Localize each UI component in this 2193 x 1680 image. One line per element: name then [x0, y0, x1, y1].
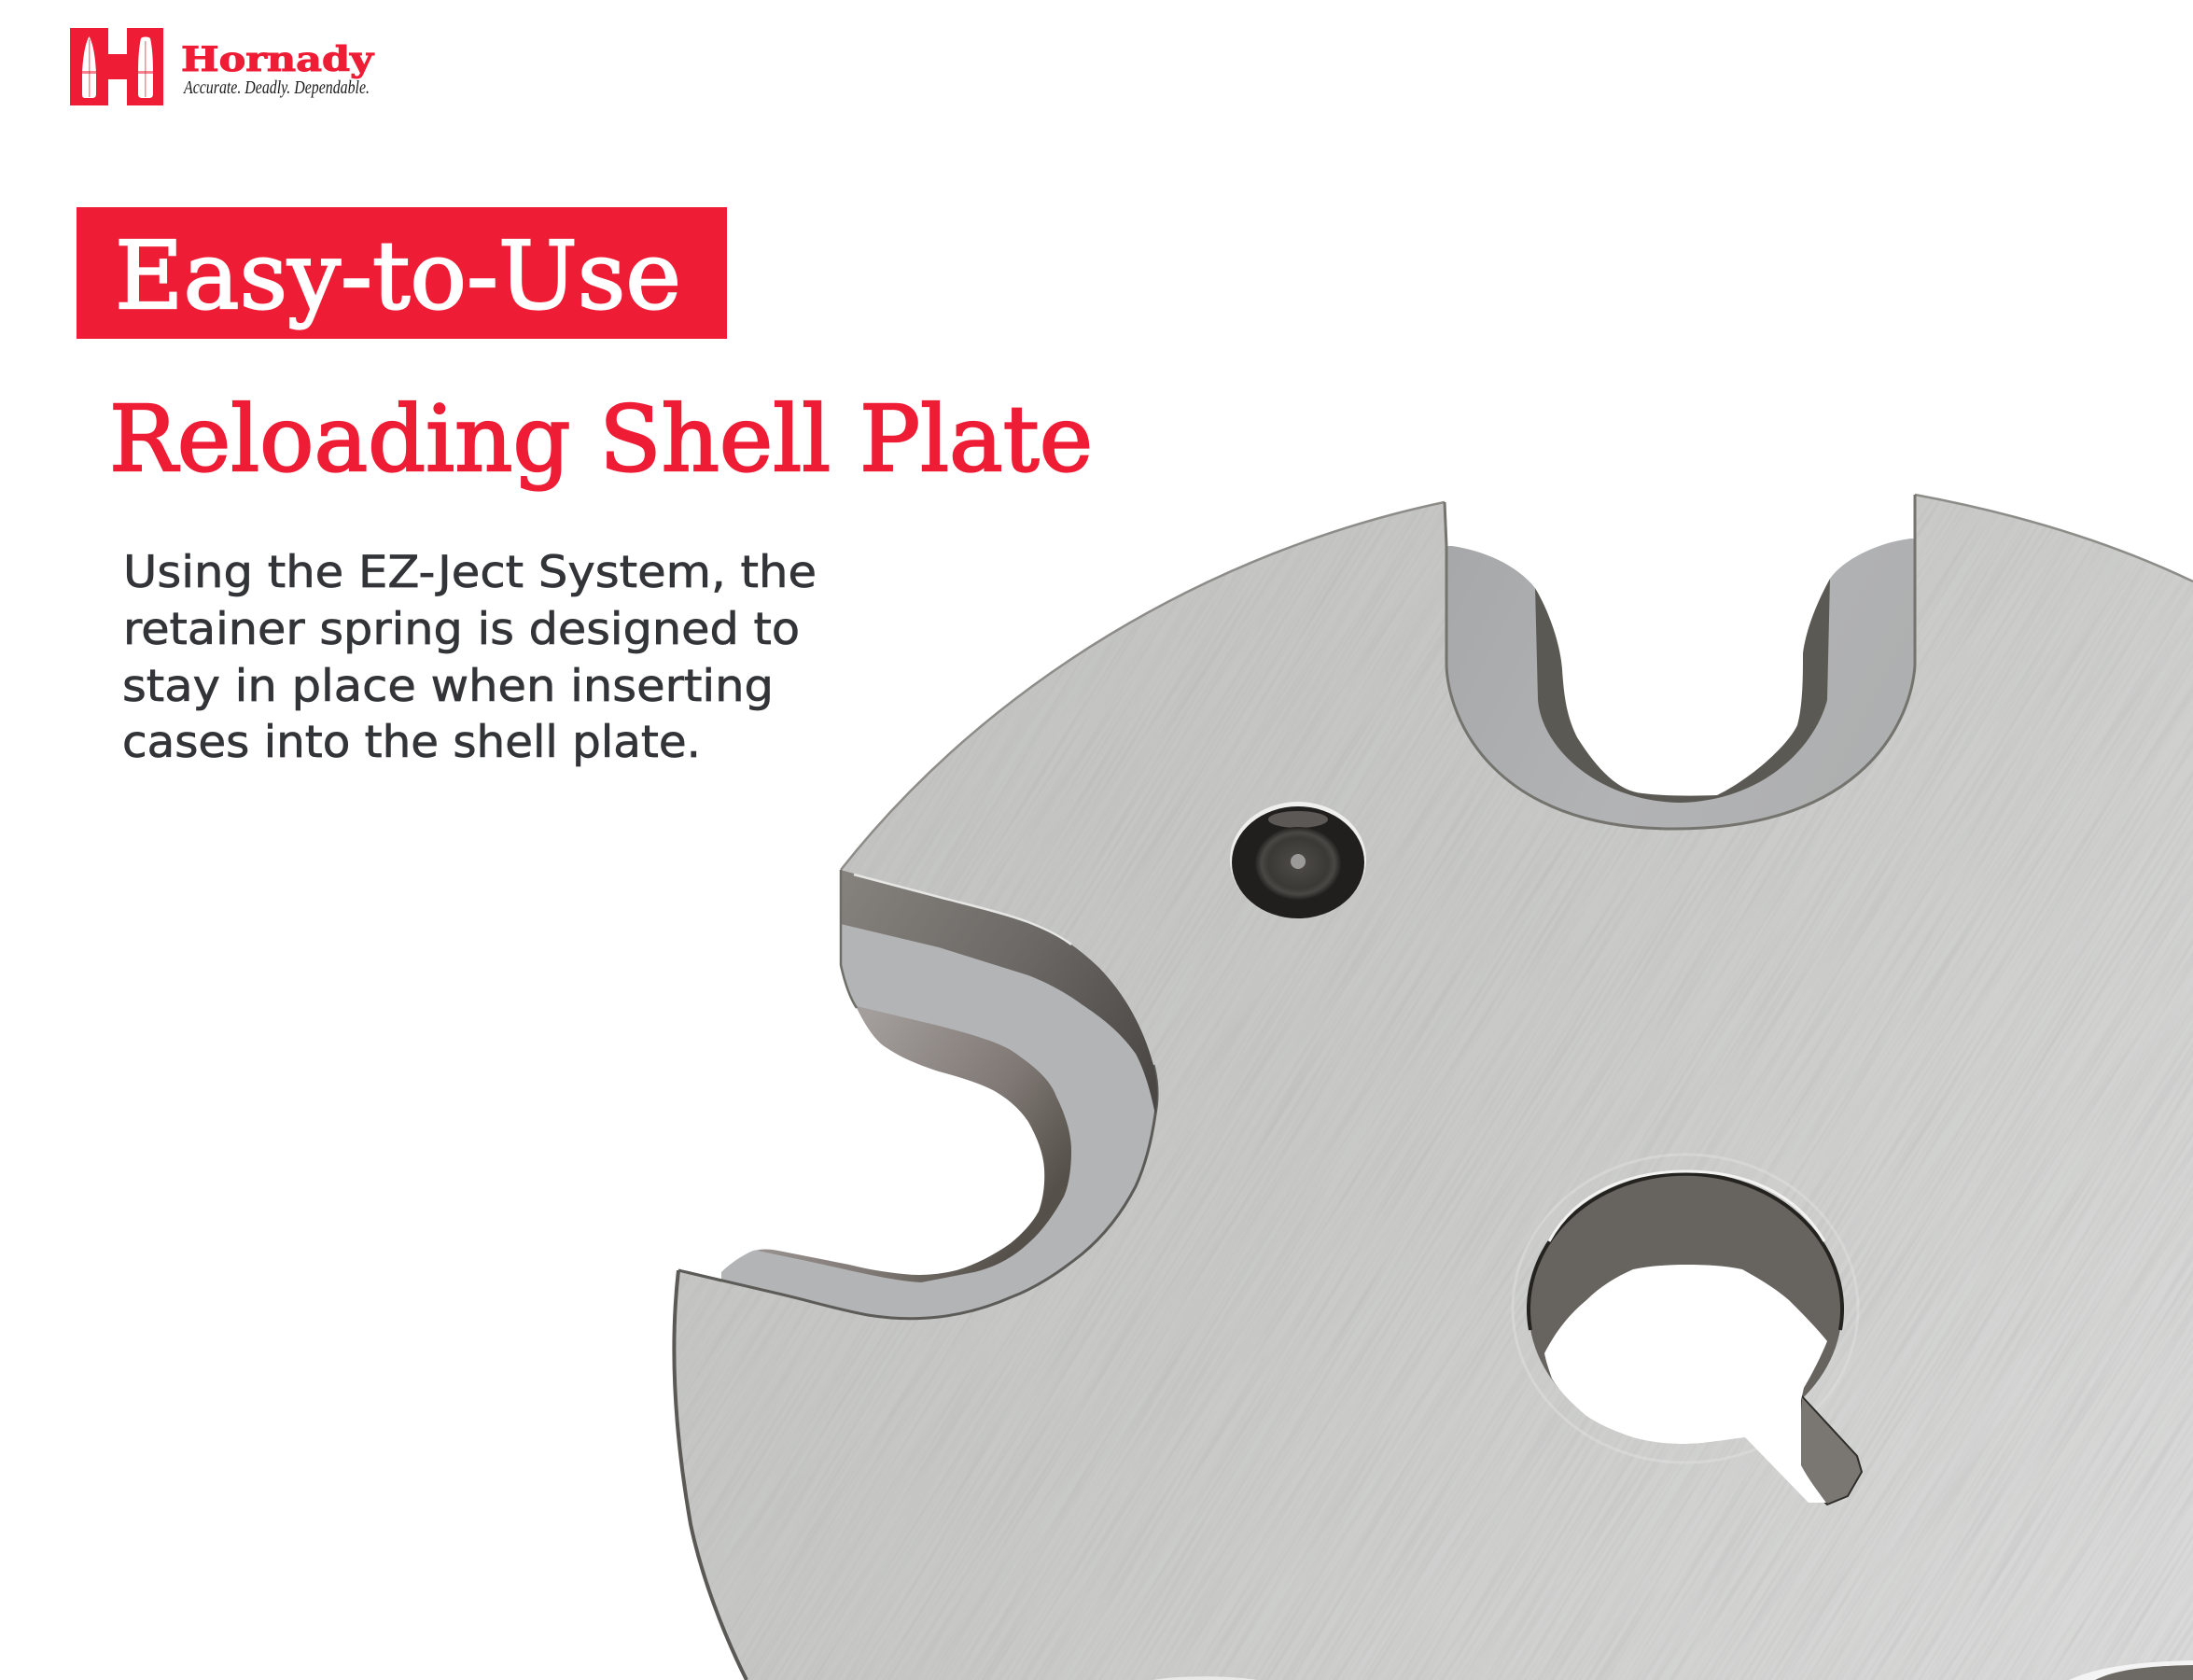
key wall: [1796, 1395, 1862, 1505]
body text: [122, 547, 817, 768]
left notch shelf: [721, 896, 1157, 1319]
illustration: shell plate: [635, 467, 2193, 1680]
left notch tip edge: [678, 1270, 721, 1281]
plate top surface: [653, 467, 2193, 1680]
body text: cases into the shell plate.: [122, 717, 701, 768]
notch upper right edge: [1913, 495, 1917, 539]
notch: top U-shaped cartridge slot: [1445, 467, 1915, 829]
heading badge: Easy-to-Use: Easy-to-Use: [115, 221, 681, 330]
hole rim highlight: [1549, 1171, 1824, 1241]
plate edge outline: top arcs: [841, 495, 2193, 870]
notch shelf: [1446, 539, 1915, 829]
body text: stay in place when inserting: [122, 661, 774, 712]
heading: Reloading Shell Plate: Reloading Shell Plate: [109, 386, 1093, 492]
logo wordmark: Hornady: [181, 40, 374, 79]
notch: left S-shaped cartridge slot: [635, 840, 1157, 1319]
bottom hole edge right: [2069, 1660, 2193, 1680]
notch upper left edge: [1445, 502, 1446, 546]
left notch upper wall: [841, 870, 1157, 1114]
notch inner wall: [1535, 579, 1830, 803]
hole wall: [1529, 1173, 1842, 1444]
left notch lower wall: [758, 1006, 1071, 1282]
hole halo: [1513, 1155, 1858, 1463]
left notch outer edge: [678, 1065, 1157, 1319]
icon: red H emblem with bullets: [70, 28, 163, 105]
body text: Using the EZ-Ject System, the: [123, 547, 817, 598]
hole opening: [1544, 1265, 1827, 1503]
bottom hole edge left: [1153, 1676, 1257, 1680]
logo tagline: Accurate. Deadly. Dependable.: [182, 77, 370, 98]
notch outer edge: [1446, 539, 1915, 829]
left notch rim: [841, 870, 857, 1008]
screw: [1230, 802, 1366, 918]
hole rim shadow: [1529, 1174, 1842, 1330]
left notch upper highlight: [854, 875, 1071, 945]
body text: retainer spring is designed to: [123, 604, 800, 655]
plate edge outline: lower left: [674, 1270, 747, 1680]
notch opening: [1446, 467, 1914, 796]
central key hole: [1513, 1155, 1862, 1505]
logo: Hornady: [70, 28, 374, 105]
left notch opening: [635, 840, 1044, 1275]
